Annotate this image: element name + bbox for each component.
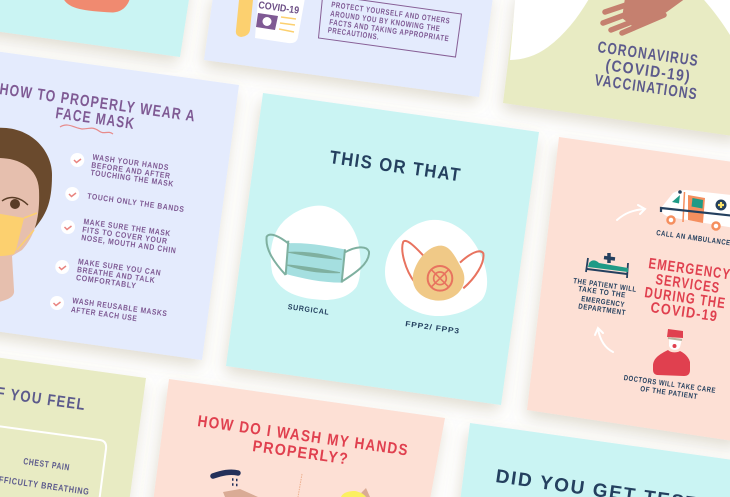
- symptoms box: [0, 425, 106, 497]
- icon: vaccination card: [236, 0, 305, 43]
- dashed divider: [298, 474, 302, 497]
- callout: protect box: AROUND YOU BY KNOWING THE: [330, 9, 441, 33]
- icon: tap and hand: [213, 472, 258, 497]
- heading: how to wear: HOW TO PROPERLY WEAR A: [0, 81, 197, 126]
- heading: emergency services: [643, 255, 730, 325]
- illustration: FFP respirator: [385, 220, 487, 316]
- callout: protect box: PRECAUTIONS.: [327, 26, 380, 42]
- checklist: AFTER EACH USE: [70, 305, 138, 323]
- panel: this or that: [226, 93, 539, 405]
- checklist: MAKE SURE YOU CAN: [77, 257, 162, 278]
- checklist: FITS TO COVER YOUR: [82, 225, 168, 246]
- checklist: TOUCH ONLY THE BANDS: [87, 192, 185, 214]
- heading: emergency services: COVID-19: [649, 299, 719, 325]
- checklist: NOSE, MOUTH AND CHIN: [81, 233, 177, 255]
- panel: top lavender card: [204, 0, 494, 97]
- decorative white blob: [510, 0, 594, 60]
- text: patient: [573, 276, 637, 317]
- icon: ambulance: [661, 190, 730, 230]
- panel: top-left cyan card: [0, 0, 192, 57]
- checklist: COMFORTABLY: [75, 273, 137, 290]
- icon: doctor: [653, 329, 690, 376]
- heading: this or that: THIS OR THAT: [328, 146, 463, 185]
- panel: coronavirus vaccinations card: [503, 0, 730, 137]
- callout: protect box: PROTECT YOURSELF AND OTHERS: [331, 0, 451, 26]
- heading: wash hands: HOW DO I WASH MY HANDS: [196, 413, 410, 460]
- panel: if you feel: [0, 355, 146, 497]
- icon: hospital bed: [586, 253, 628, 278]
- text: patient: DEPARTMENT: [578, 302, 627, 317]
- heading: vaccinations: CORONAVIRUS: [596, 39, 700, 70]
- panel: did you get tested: [459, 423, 730, 497]
- icon: hand: [603, 0, 686, 33]
- arrow: to ambulance: [617, 205, 645, 220]
- panel: emergency services: [527, 137, 730, 442]
- arrow: to bed: [595, 328, 613, 352]
- label: surgical: SURGICAL: [287, 302, 330, 317]
- icon: vaccination card: COVID-19: [258, 0, 300, 17]
- heading: vaccinations: [593, 39, 700, 103]
- text: patient: EMERGENCY: [581, 294, 626, 309]
- text: symptoms: [0, 456, 90, 497]
- checklist: MAKE SURE THE MASK: [83, 217, 171, 238]
- checklist: BEFORE AND AFTER: [91, 161, 171, 181]
- heading: vaccinations: (COVID-19): [604, 57, 692, 86]
- squiggle underline: [60, 125, 113, 134]
- illustration: face with mask: [0, 128, 52, 303]
- text: patient: THE PATIENT WILL: [573, 276, 637, 294]
- text: patient: TAKE TO THE: [578, 284, 627, 300]
- checklist: TOUCHING THE MASK: [90, 168, 174, 189]
- heading: vaccinations: VACCINATIONS: [593, 72, 699, 103]
- checklist: WASH REUSABLE MASKS: [72, 296, 168, 318]
- callout: protect box: FACTS AND TAKING APPROPRIATE: [329, 18, 450, 43]
- checklist: BREATHE AND TALK: [76, 265, 156, 285]
- heading: wash hands: PROPERLY?: [251, 438, 350, 468]
- panel: how to wear a face mask: [0, 49, 239, 360]
- heading: how to wear: FACE MASK: [54, 105, 136, 133]
- icon: salmon shape: [63, 0, 130, 12]
- label: fpp2/fpp3: FPP2/ FPP3: [405, 319, 460, 336]
- illustration: surgical mask: [266, 206, 369, 300]
- text: doctors: OF THE PATIENT: [640, 384, 698, 401]
- callout: protect box: [318, 0, 462, 57]
- icon: soapy hand: [341, 488, 370, 497]
- checklist: WASH YOUR HANDS: [92, 153, 170, 172]
- checklist: [50, 153, 185, 323]
- panel: how do I wash my hands: [152, 379, 445, 497]
- text: symptoms: CHEST PAIN: [23, 456, 71, 473]
